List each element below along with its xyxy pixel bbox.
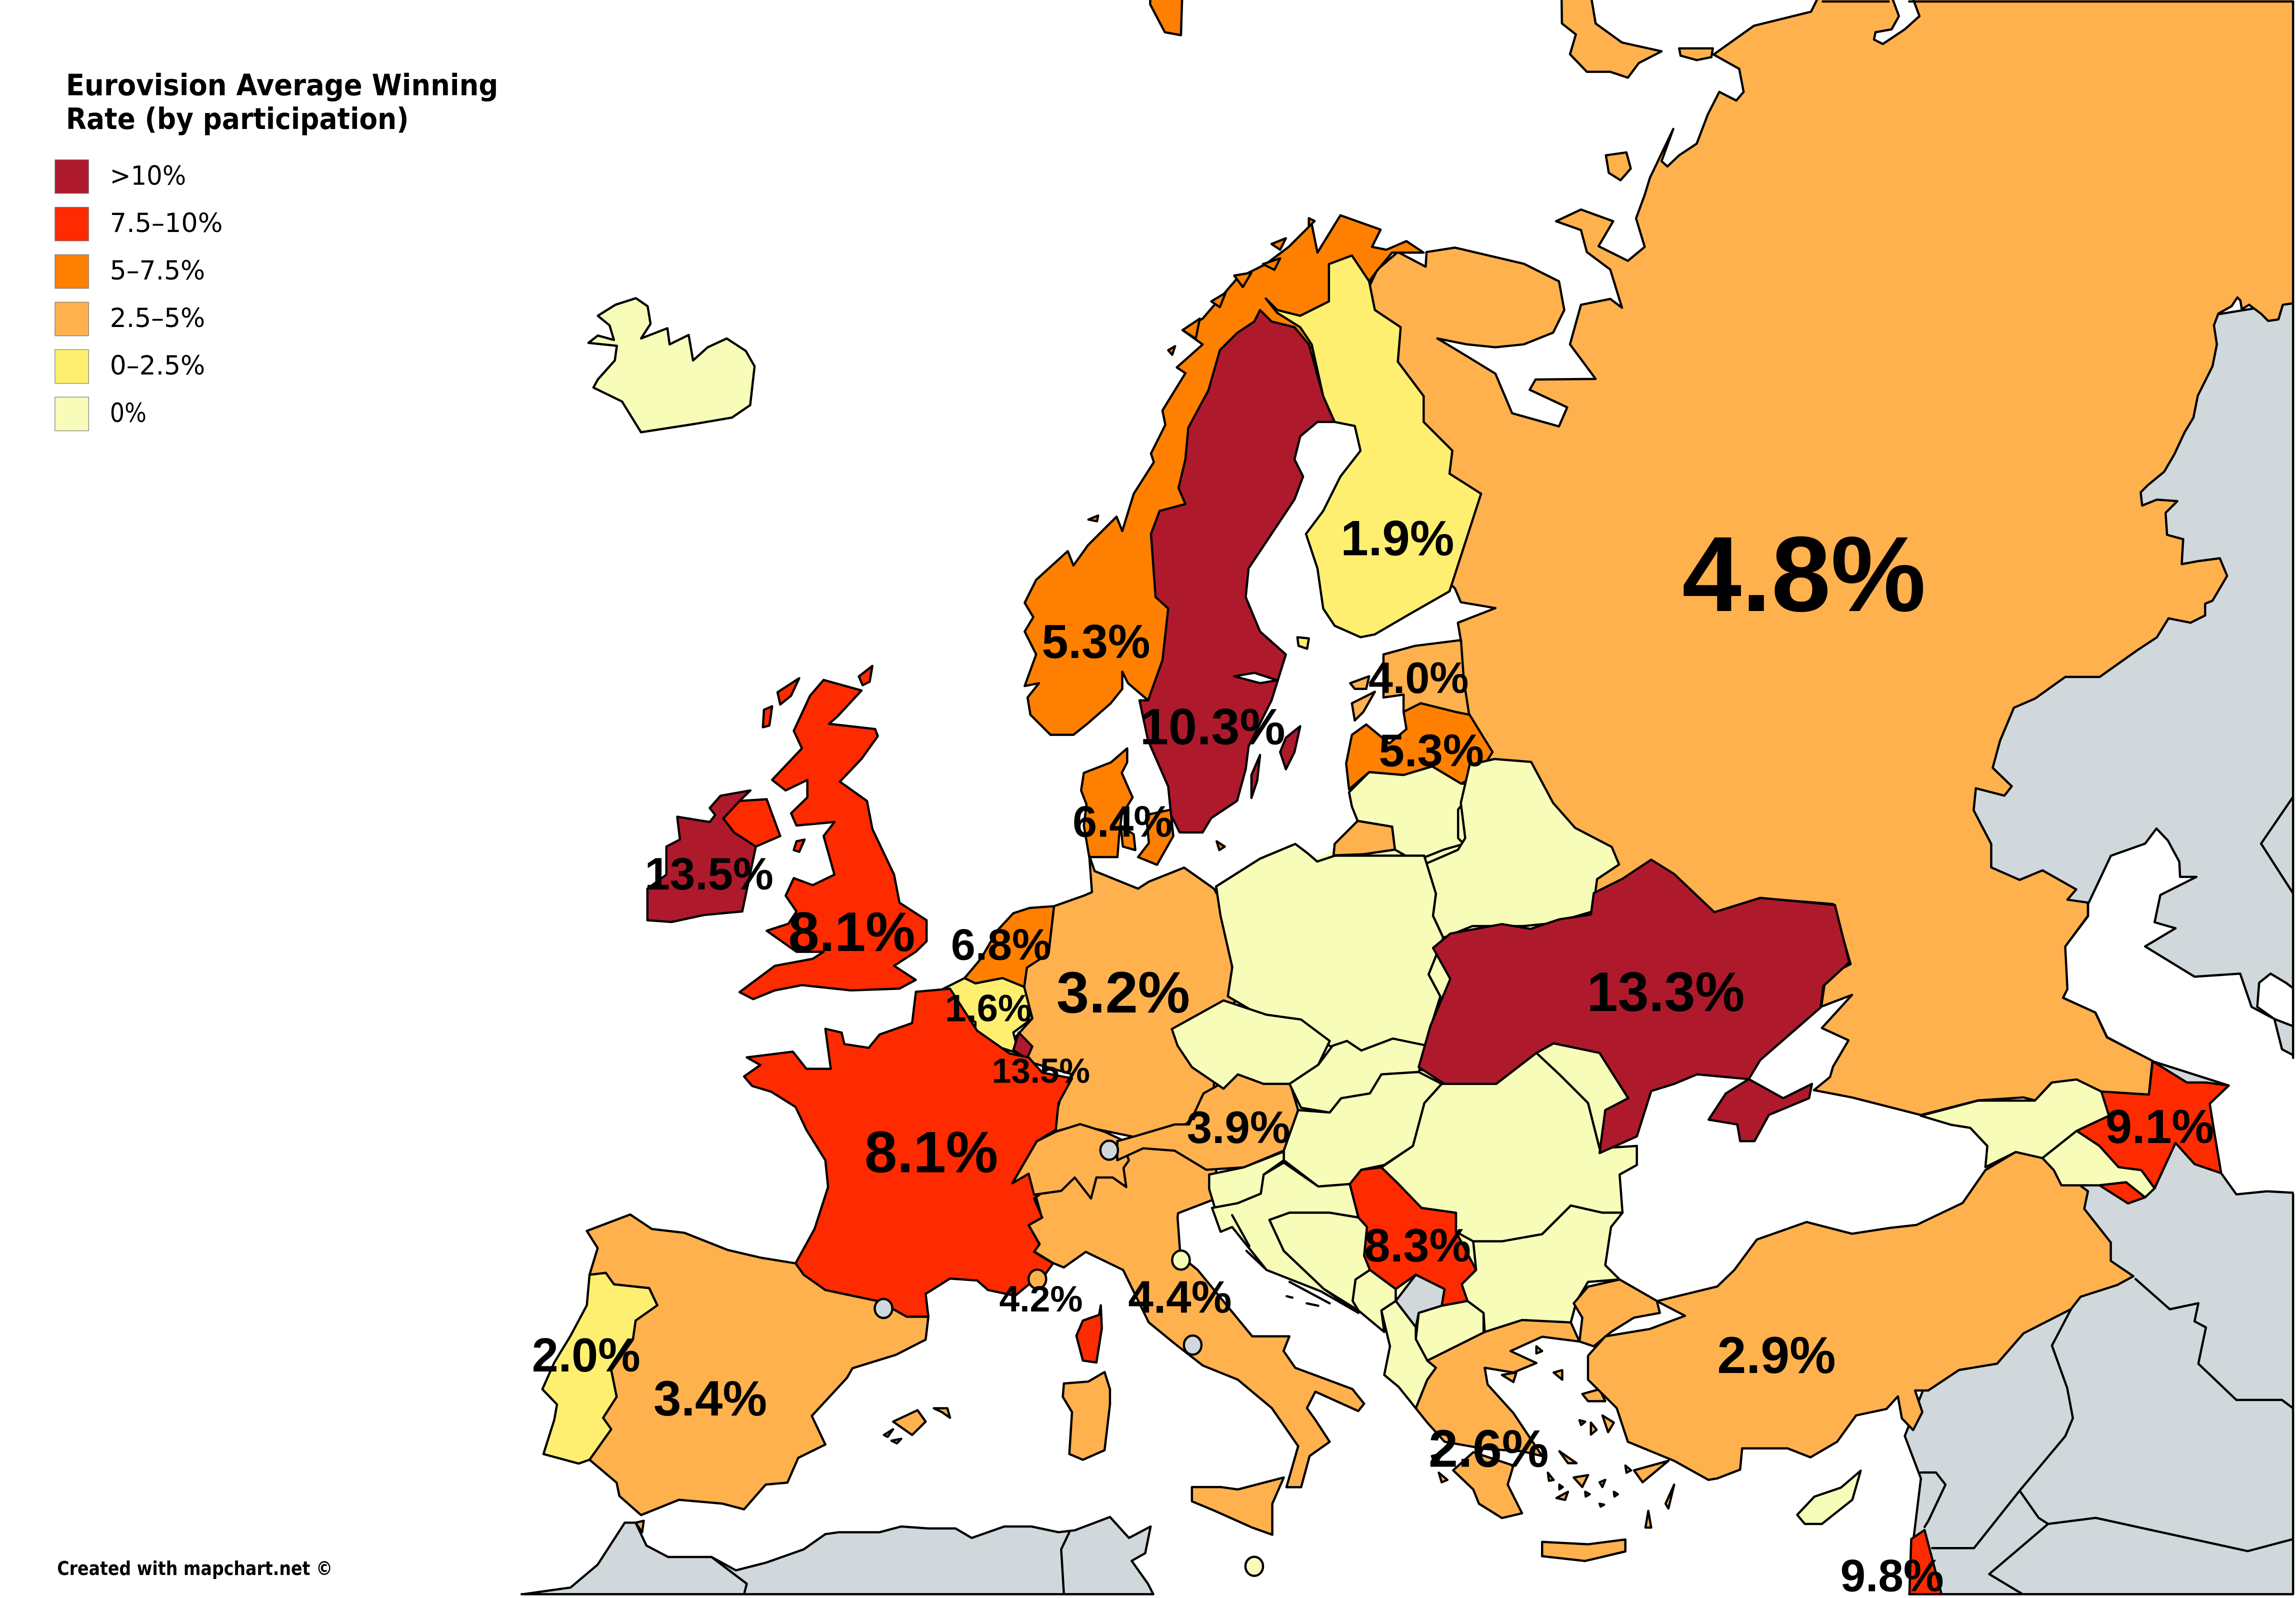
label: Spain: 3.4% <box>654 1371 767 1426</box>
country: Denmark, islands <box>1120 810 1225 865</box>
Greece: Crete <box>1542 1540 1626 1561</box>
non-participating land: Middle East and Central Asia <box>1905 300 2296 1598</box>
microstate: Malta marker <box>1246 1557 1263 1576</box>
legend label: 5-7.5%: 5–7.5% <box>110 256 205 286</box>
legend label: 7.5-10%: 7.5–10% <box>110 208 222 238</box>
label: Monaco: 4.2% <box>1000 1278 1083 1320</box>
country: Turkey, Thrace <box>1574 1280 1660 1346</box>
country: Germany <box>1014 856 1236 1138</box>
country: Montenegro <box>1352 1270 1396 1332</box>
label: France: 8.1% <box>864 1119 998 1184</box>
central Europe land underlay <box>1172 791 1626 1326</box>
country: Armenia <box>2042 1131 2154 1198</box>
microstate: Vatican marker <box>1184 1336 1202 1354</box>
Caucasus <box>1797 1062 2229 1594</box>
country: Hungary <box>1284 1072 1442 1186</box>
France: Corsica <box>1076 1306 1102 1362</box>
country: Czech Republic <box>1172 1000 1330 1088</box>
country: Azerbaijan <box>2076 1062 2229 1188</box>
legend swatch: over 10% <box>55 160 88 194</box>
Estonia: islands <box>1350 676 1375 720</box>
Ukraine: Crimea <box>1708 1079 1812 1141</box>
country: Latvia <box>1346 704 1492 790</box>
label: Denmark: 6.4% <box>1072 796 1172 846</box>
country: Norway <box>1024 216 1424 735</box>
Sweden: Oland <box>1252 755 1260 798</box>
country: Belgium <box>940 978 1032 1054</box>
country: Moldova <box>1536 1044 1628 1148</box>
Greece: Peloponnese <box>1453 1452 1522 1518</box>
label: Netherlands: 6.8% <box>951 920 1051 969</box>
country: Italy <box>1028 1143 1364 1487</box>
Kosovo <box>1396 1274 1444 1327</box>
microstate: San Marino marker <box>1172 1250 1190 1270</box>
non-participating land: North Africa <box>522 1517 1154 1594</box>
label: Greece: 2.6% <box>1428 1420 1549 1478</box>
country: Luxembourg <box>1014 1032 1032 1059</box>
country: Ukraine <box>1418 860 1850 1153</box>
country: Spain <box>587 1214 928 1515</box>
label: Austria: 3.9% <box>1187 1102 1290 1153</box>
label: Norway: 5.3% <box>1042 616 1150 668</box>
legend title: Eurovision Average Winning <box>66 68 498 102</box>
country: Austria <box>1118 1074 1298 1170</box>
Russia: Kaliningrad <box>1334 821 1395 856</box>
British Isles and Low Countries <box>648 666 1236 1138</box>
country: Slovakia <box>1290 1038 1428 1112</box>
Central Europe, Balkans and Black Sea <box>1118 860 1850 1561</box>
country: Serbia <box>1350 1168 1476 1306</box>
United Kingdom: Northern Ireland <box>724 799 780 846</box>
country: Ireland <box>648 790 756 922</box>
Croatia: Adriatic islands <box>1232 1215 1330 1306</box>
country: Croatia <box>1212 1162 1358 1313</box>
legend label: 2.5-5%: 2.5–5% <box>110 303 205 334</box>
label: Ireland: 13.5% <box>644 849 774 900</box>
microstate: Andorra marker <box>874 1299 892 1318</box>
legend swatch: 0% <box>55 397 88 431</box>
country: Switzerland <box>1012 1124 1129 1198</box>
legend label: over 10%: >10% <box>110 160 186 191</box>
Nordic and Baltic countries <box>1024 216 1492 861</box>
legend swatch: 2.5-5% <box>55 302 88 336</box>
Italy: Sardinia <box>1063 1372 1110 1460</box>
country: Bulgaria <box>1462 1206 1622 1332</box>
country: Finland <box>1266 256 1481 637</box>
map frame lines <box>522 2 2293 1594</box>
legend swatch: 7.5-10% <box>55 207 88 241</box>
country: Estonia <box>1384 640 1470 718</box>
country: Albania <box>1382 1301 1436 1408</box>
borders of non-participating Middle East countries <box>1921 796 2294 1594</box>
Iceland <box>588 298 754 432</box>
label: Portugal: 2.0% <box>532 1329 640 1382</box>
country: Cyprus <box>1797 1470 1860 1524</box>
Russia: Arctic islands <box>1562 0 1713 180</box>
legend label: 0-2.5%: 0–2.5% <box>110 350 205 381</box>
country: Lithuania <box>1349 766 1470 861</box>
Italy: Sicily <box>1192 1478 1284 1534</box>
label: Estonia: 4.0% <box>1368 653 1468 702</box>
North Africa internal borders <box>712 1532 1070 1594</box>
label: Azerbaijan: 9.1% <box>2106 1100 2214 1154</box>
Western Europe <box>542 988 1129 1532</box>
label: Luxembourg: 13.5% <box>992 1052 1090 1090</box>
page margins clearing map overflow <box>513 0 2296 1598</box>
legend title: Rate (by participation) <box>66 102 409 136</box>
country: Slovenia <box>1209 1152 1284 1208</box>
country: Romania <box>1382 1053 1637 1242</box>
country: Netherlands <box>964 906 1054 987</box>
label: Finland: 1.9% <box>1340 511 1454 566</box>
country: Israel <box>1910 1530 1942 1594</box>
Spain: Balearic islands <box>884 1408 950 1444</box>
label: Ukraine: 13.3% <box>1587 960 1744 1023</box>
Finland: Aland islands <box>1298 637 1309 648</box>
Spain: Ceuta <box>636 1521 644 1532</box>
microstate: Liechtenstein marker <box>1100 1140 1118 1160</box>
label: Belgium: 1.6% <box>945 988 1032 1030</box>
country: Sweden <box>1140 310 1334 832</box>
label: Serbia: 8.3% <box>1364 1219 1471 1272</box>
country: North Macedonia <box>1416 1301 1484 1360</box>
label: Italy: 4.4% <box>1128 1272 1232 1323</box>
Sweden: Gotland <box>1280 726 1300 770</box>
country: Greece mainland <box>1416 1320 1580 1456</box>
country: Poland <box>1216 844 1443 1071</box>
label: Latvia: 5.3% <box>1379 724 1484 776</box>
Azerbaijan: Nakhchivan <box>2100 1182 2145 1204</box>
legend swatch: 0-2.5% <box>55 350 88 384</box>
label: United Kingdom: 8.1% <box>788 900 915 963</box>
label: Germany: 3.2% <box>1056 960 1190 1025</box>
United Kingdom: Scottish islands <box>763 666 872 852</box>
country: Georgia <box>1921 1080 2109 1167</box>
legend <box>55 68 498 431</box>
country: Bosnia and Herzegovina <box>1270 1212 1370 1310</box>
label: Russia: 4.8% <box>1682 514 1926 634</box>
legend swatch: 5-7.5% <box>55 254 88 288</box>
label: Turkey: 2.9% <box>1717 1326 1836 1384</box>
legend label: 0%: 0% <box>110 398 146 428</box>
country: Denmark, Jutland <box>1081 748 1132 857</box>
country: Belarus <box>1424 759 1619 938</box>
land and water shapes of the map <box>542 0 2296 1594</box>
credit: Created with mapchart.net © <box>57 1558 332 1580</box>
Norwegian Arctic island <box>1150 0 1182 35</box>
Norway: coastal islands <box>1088 218 1314 522</box>
country: Portugal <box>542 1273 658 1464</box>
Greece: Aegean islands <box>1432 1346 1674 1528</box>
microstate: Monaco marker <box>1028 1270 1046 1288</box>
country: Turkey, Anatolia <box>1588 1152 2134 1480</box>
country: Russia <box>1362 0 2296 1115</box>
label: Sweden: 10.3% <box>1140 698 1286 756</box>
Kara-Bogaz lagoon <box>2258 974 2296 1028</box>
country: Poland, western edge overlay <box>1216 844 1443 1071</box>
country: United Kingdom <box>740 680 926 999</box>
water: Caspian Sea <box>2064 828 2296 1194</box>
country: France <box>744 988 1072 1316</box>
Sweden: Stockholm archipelago water <box>1234 673 1278 683</box>
